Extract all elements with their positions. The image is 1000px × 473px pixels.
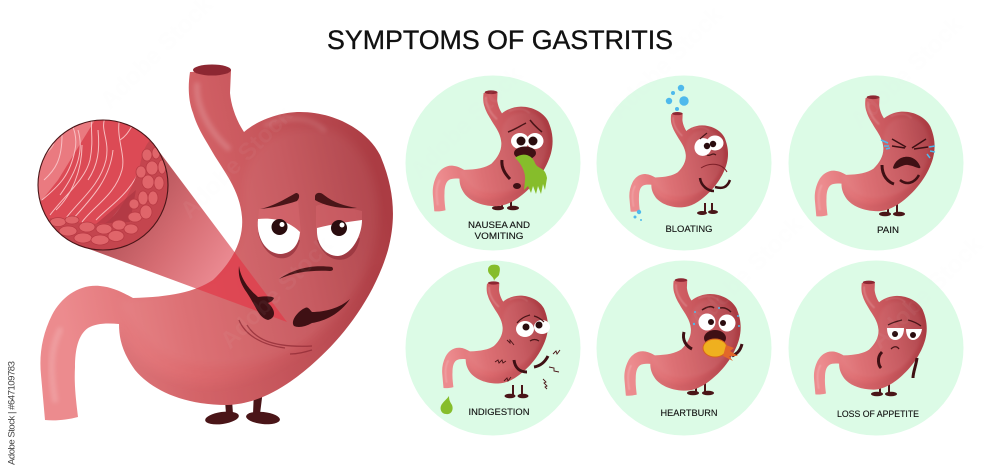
magnified mucosa circle: [38, 115, 175, 255]
pain face: [881, 139, 935, 184]
label: NAUSEA AND: [468, 220, 530, 231]
green vomit: [515, 155, 547, 194]
watermark: Adobe Stock: [405, 61, 528, 184]
panel: pain: [788, 76, 964, 250]
stock side label: Adobe Stock | #647109783: [6, 361, 18, 465]
face: [239, 193, 362, 354]
watermark: Adobe Stock: [685, 211, 808, 334]
label: INDIGESTION: [468, 407, 530, 418]
bubbles: [634, 85, 689, 221]
stomach character: [624, 278, 743, 396]
panel: bloating: [596, 76, 772, 250]
gas clouds: [488, 265, 500, 281]
label: PAIN: [877, 225, 899, 236]
panel: nausea and vomiting: [406, 76, 580, 250]
sad face: [878, 320, 922, 378]
illustration: main stomach character: [38, 64, 400, 426]
fire breath: [703, 339, 738, 361]
heartburn face: [683, 307, 742, 356]
main stomach body: [40, 64, 400, 420]
vomiting face: [502, 120, 544, 189]
panel: nausea and vomiting: VOMITING: [474, 231, 524, 242]
watermark: Adobe Stock: [215, 231, 338, 354]
label: BLOATING: [666, 224, 712, 235]
stomach character: [629, 112, 730, 212]
indigestion face: [495, 315, 560, 389]
feet: [705, 203, 712, 212]
bloated face: [691, 133, 730, 191]
label: LOSS OF APPETITE: [837, 409, 919, 420]
feet: [696, 383, 705, 392]
title: SYMPTOMS OF GASTRITIS: [327, 25, 673, 55]
feet: [502, 198, 511, 207]
feet: [880, 384, 889, 393]
stomach character: [814, 281, 929, 395]
feet: [513, 385, 522, 395]
magnifier cone: [81, 146, 287, 322]
stomach character: [433, 90, 555, 211]
legs and feet: [204, 390, 281, 426]
watermark: Adobe Stock: [865, 231, 988, 354]
stomach character: [815, 95, 937, 216]
panel: heartburn: [596, 260, 772, 436]
cone overlap on stomach: [196, 252, 287, 322]
panel: indigestion: [406, 260, 580, 436]
feet: [888, 204, 897, 213]
label: HEARTBURN: [660, 408, 718, 419]
watermark: Adobe Stock: [845, 11, 968, 134]
watermark: [95, 0, 988, 354]
watermark: Adobe Stock: [605, 1, 728, 124]
watermark: Adobe Stock: [175, 101, 298, 224]
panel: loss of appetite: [788, 260, 964, 436]
stomach character: [442, 281, 550, 388]
